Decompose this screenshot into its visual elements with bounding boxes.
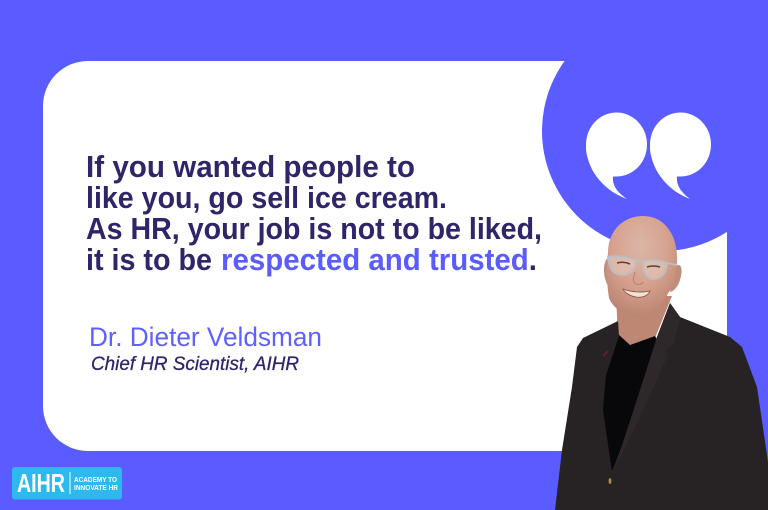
circle cut-out behind quotation marks xyxy=(542,11,768,251)
eyes xyxy=(617,262,660,267)
jacket lapel xyxy=(614,303,680,470)
speaker name: Dr. Dieter Veldsman xyxy=(89,322,322,352)
logo tagline: INNOVATE HR xyxy=(74,483,119,492)
jacket button xyxy=(608,478,612,484)
quote text: If you wanted people to xyxy=(86,149,415,184)
neck xyxy=(616,296,672,346)
glasses xyxy=(608,256,677,279)
nose xyxy=(633,272,643,284)
icon: quotation marks xyxy=(586,113,711,199)
logo divider xyxy=(70,472,71,494)
head xyxy=(607,216,677,316)
logo: AIHR xyxy=(12,467,122,500)
speaker role: Chief HR Scientist, AIHR xyxy=(91,353,299,375)
panel: white quote card xyxy=(43,61,727,451)
smile xyxy=(623,289,650,297)
jacket stitch xyxy=(603,351,608,356)
ears xyxy=(604,258,682,292)
quote text: like you, go sell ice cream. xyxy=(86,180,447,215)
quote text: respected and trusted. xyxy=(221,242,537,277)
quote text xyxy=(86,149,542,277)
quote text: it is to be xyxy=(86,242,212,277)
jacket xyxy=(555,303,768,510)
logo tagline: ACADEMY TO xyxy=(74,475,117,484)
black t-shirt xyxy=(600,334,660,472)
quote text: As HR, your job is not to be liked, xyxy=(86,211,542,246)
logo background xyxy=(12,467,122,500)
portrait of speaker xyxy=(555,216,768,510)
logo wordmark: AIHR xyxy=(17,470,65,498)
